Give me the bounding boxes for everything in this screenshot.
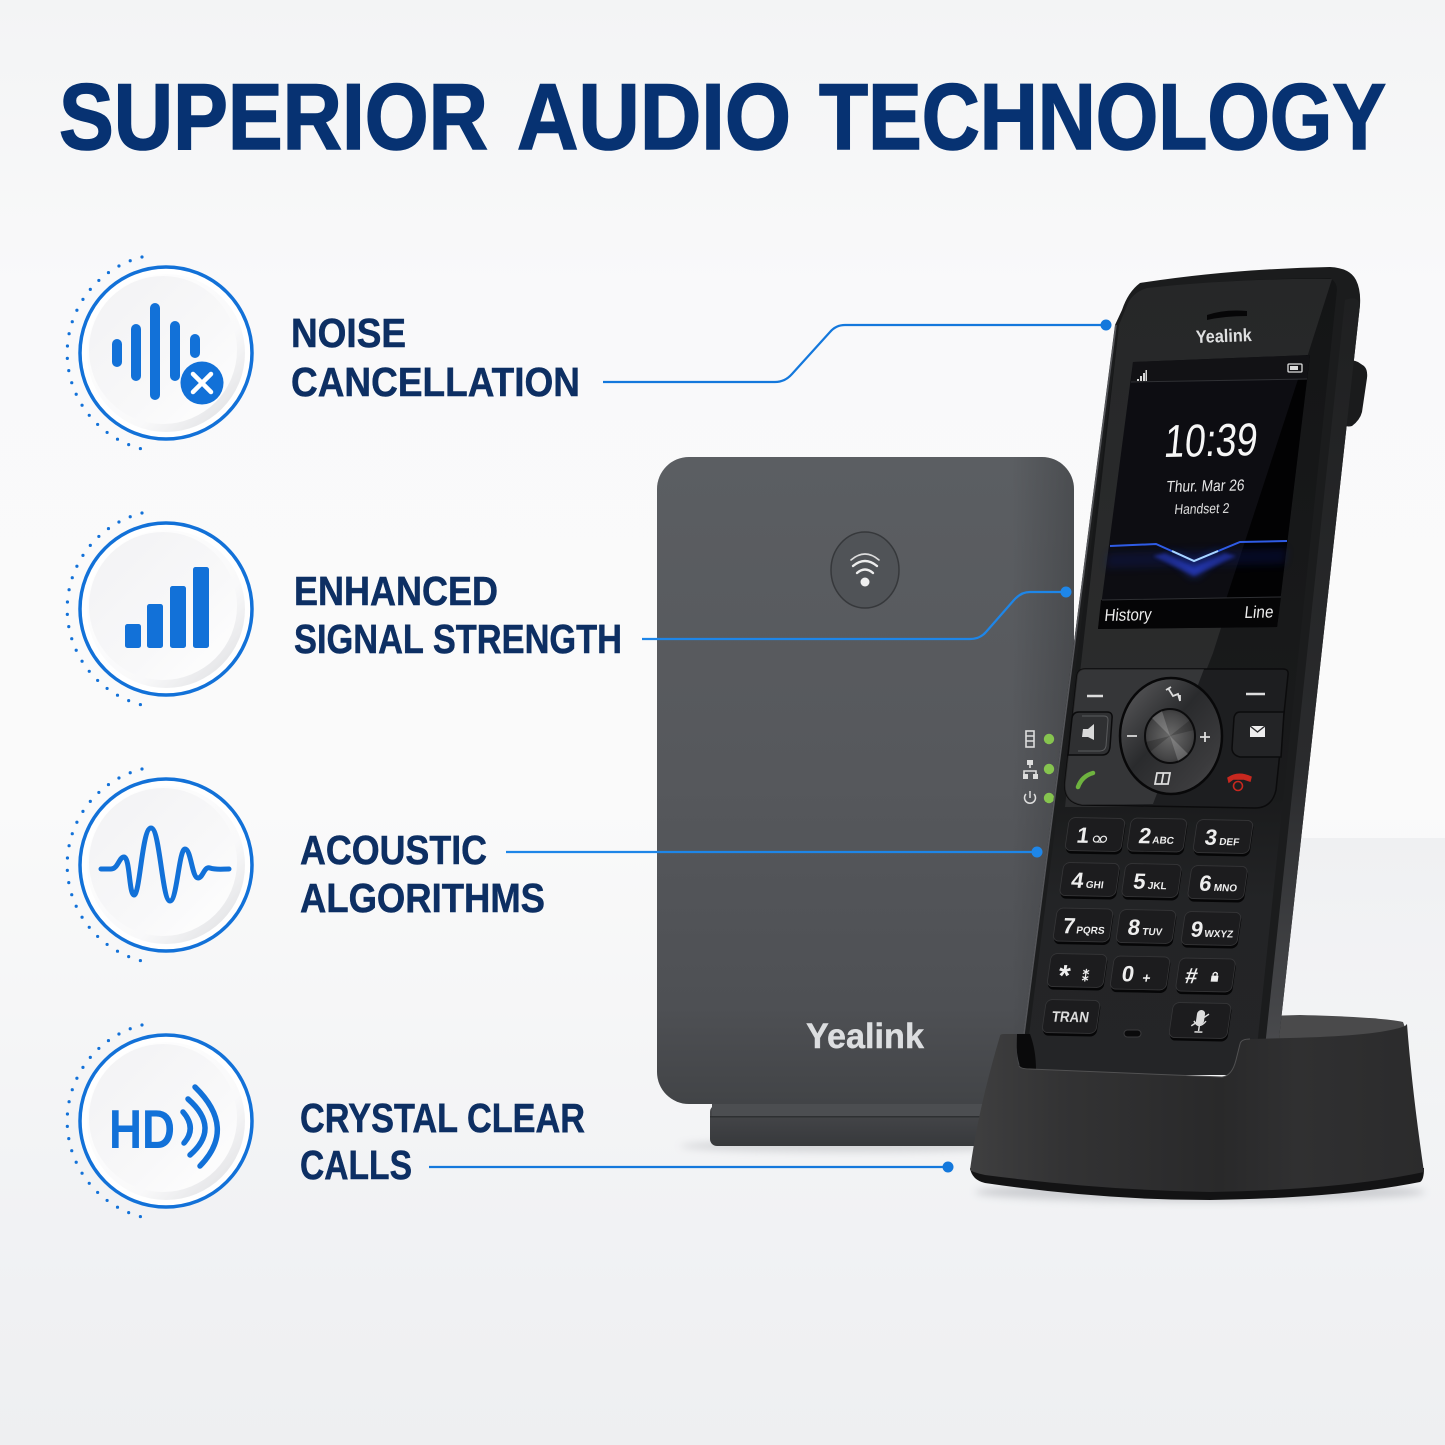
speaker key [1068, 712, 1112, 755]
base station body [657, 457, 1074, 1104]
key star [1046, 953, 1108, 994]
label: acoustic algorithms [300, 827, 545, 921]
glass reflection [1065, 279, 1332, 807]
navigation ring [1120, 678, 1222, 794]
key 9: WXYZ [1203, 929, 1234, 940]
key 3: DEF [1218, 837, 1240, 848]
key 4: 4 [1070, 868, 1086, 893]
key 6 [1187, 865, 1249, 903]
handset name: Handset 2 [1174, 500, 1230, 517]
key 3: 3 [1203, 825, 1219, 850]
ring glyphs [1127, 687, 1210, 784]
navigation panel [1065, 669, 1288, 808]
label: noise cancellation [291, 310, 580, 405]
base station logo: Yealink [806, 1017, 925, 1056]
red hangup icon [1228, 774, 1251, 790]
callout lines [429, 320, 1112, 1172]
cradle bottom plate [970, 1168, 1424, 1200]
label: noise cancellation: NOISE [291, 310, 406, 356]
key 3 [1192, 819, 1254, 857]
label: crystal clear calls: CALLS [300, 1142, 412, 1188]
key 9: 9 [1189, 917, 1205, 942]
key 0 [1109, 956, 1171, 993]
wifi button [831, 532, 899, 608]
key 2: ABC [1151, 835, 1175, 847]
label: enhanced signal strength [294, 568, 622, 662]
softkey dashes [1087, 694, 1265, 696]
label: crystal clear calls [300, 1095, 585, 1188]
label: acoustic algorithms: ALGORITHMS [300, 875, 545, 921]
handset screen [1098, 355, 1310, 629]
key 8: TUV [1141, 927, 1163, 938]
battery icon [1288, 364, 1302, 372]
icon: noise cancellation [67, 257, 252, 449]
base station foot [710, 1103, 1000, 1146]
keypad [1041, 817, 1254, 1042]
key star: * [1056, 960, 1073, 993]
icon: acoustic waveform [67, 769, 252, 961]
key 5: JKL [1147, 881, 1167, 892]
key hash [1175, 958, 1237, 995]
key 0: 0 [1120, 961, 1136, 986]
key star: ⁑ [1081, 969, 1090, 984]
icon: HD audio: HD [109, 1098, 175, 1160]
cradle front [970, 1024, 1424, 1192]
cradle pocket rim [1019, 1039, 1250, 1077]
key 1: 1 [1075, 823, 1091, 848]
cradle back rim [1252, 1015, 1406, 1042]
key 6: MNO [1213, 883, 1238, 894]
side clip [1341, 360, 1367, 426]
label: noise cancellation: CANCELLATION [291, 359, 580, 405]
handset and charging cradle [970, 267, 1425, 1202]
key 6: 6 [1198, 871, 1213, 896]
green call icon [1078, 773, 1093, 787]
blue wave [1106, 541, 1287, 576]
cradle shadow [975, 1182, 1425, 1202]
icon: HD audio [67, 1025, 252, 1217]
key 9 [1180, 911, 1242, 949]
left edge highlight [1024, 325, 1116, 1034]
key 8 [1115, 909, 1177, 947]
label: crystal clear calls: CRYSTAL CLEAR [300, 1095, 585, 1141]
key 7: PQRS [1075, 925, 1106, 937]
cradle pocket shadow [1016, 1034, 1036, 1070]
key 5: 5 [1132, 869, 1147, 894]
title [59, 64, 1386, 169]
date: Thur. Mar 26 [1166, 476, 1245, 496]
base station [657, 457, 1074, 1152]
key 8: 8 [1126, 915, 1142, 940]
status LEDs [1023, 731, 1054, 803]
key 4 [1059, 862, 1121, 900]
label: acoustic algorithms: ACOUSTIC [300, 827, 487, 873]
title: SUPERIOR [59, 64, 488, 169]
key 4: GHI [1085, 880, 1104, 891]
line softkey: Line [1244, 602, 1274, 622]
ok button [1145, 709, 1195, 763]
history softkey: History [1104, 605, 1153, 625]
title: AUDIO [517, 64, 791, 169]
microphone slot [1124, 1030, 1141, 1037]
key 2 [1126, 818, 1188, 855]
handset logo: Yealink [1195, 325, 1253, 347]
signal icon [1137, 370, 1147, 381]
right side band [1262, 298, 1360, 1075]
key 7: 7 [1061, 913, 1077, 938]
key 7 [1052, 908, 1114, 945]
key TRAN: TRAN [1051, 1009, 1090, 1026]
mail key [1232, 712, 1284, 757]
key mute [1168, 1002, 1233, 1042]
label: enhanced signal strength: ENHANCED [294, 568, 498, 614]
key 0: + [1141, 970, 1152, 986]
key TRAN [1041, 999, 1101, 1037]
key 1 [1064, 817, 1126, 855]
handset face [1024, 278, 1337, 1075]
key hash: # [1184, 963, 1199, 988]
handset body [1018, 267, 1360, 1075]
earpiece [1207, 310, 1247, 320]
clock: 10:39 [1162, 413, 1260, 467]
label: enhanced signal strength: SIGNAL STRENGTH [294, 616, 622, 662]
key 5 [1121, 863, 1183, 901]
icon: signal strength [67, 513, 252, 705]
key 2: 2 [1137, 823, 1153, 848]
